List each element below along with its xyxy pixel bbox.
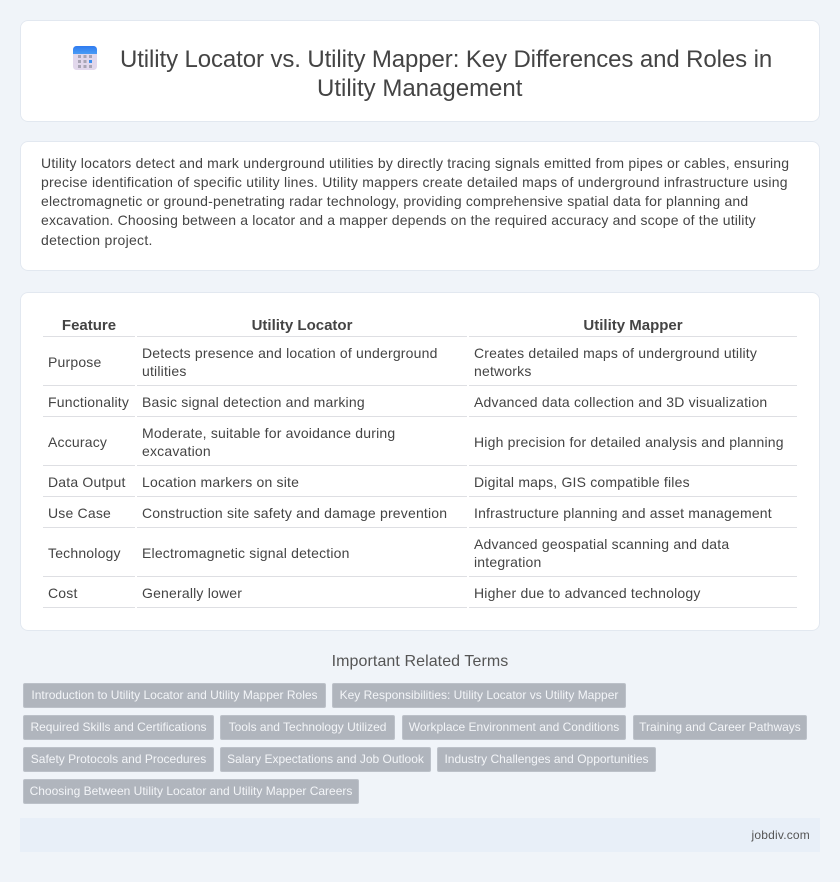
icon: calendar xyxy=(73,46,97,70)
row: purpose: utilities xyxy=(142,362,187,378)
row: accuracy: High precision for detailed analysis and planning xyxy=(474,434,784,450)
row: technology: integration xyxy=(474,554,541,570)
footer source text: jobdiv.com xyxy=(752,828,810,842)
row: functionality: Basic signal detection and marking xyxy=(142,394,365,410)
row: data output: Location markers on site xyxy=(142,474,299,490)
row: cost: Higher due to advanced technology xyxy=(474,584,701,600)
tag: Workplace Environment and Conditions xyxy=(409,720,619,734)
row: data output: Data Output xyxy=(48,474,126,490)
row: data output xyxy=(43,474,797,497)
title: Utility Management xyxy=(317,75,522,102)
row: use case: Construction site safety and damage prevention xyxy=(142,504,447,520)
row: accuracy xyxy=(43,424,797,466)
tag xyxy=(23,779,359,804)
tag: Introduction to Utility Locator and Utility Mapper Roles xyxy=(31,688,318,702)
row: accuracy: Moderate, suitable for avoidance during xyxy=(142,424,395,440)
panel: title card xyxy=(20,20,820,122)
title: Utility Locator vs. Utility Mapper: Key Differences and Roles in xyxy=(120,46,772,73)
row: cost: Generally lower xyxy=(142,584,242,600)
intro paragraph xyxy=(41,154,789,248)
row: functionality: Functionality xyxy=(48,394,129,410)
intro paragraph: detection project. xyxy=(41,232,153,248)
row: purpose: Detects presence and location of underground xyxy=(142,344,438,360)
tag: Required Skills and Certifications xyxy=(30,720,207,734)
tag: Safety Protocols and Procedures xyxy=(31,752,206,766)
related terms tags xyxy=(23,683,807,804)
panel: comparison table xyxy=(20,292,820,631)
table header: Feature xyxy=(62,316,116,334)
tag: Training and Career Pathways xyxy=(639,720,801,734)
table header xyxy=(43,316,797,337)
panel: introduction text xyxy=(20,141,820,271)
tag: Tools and Technology Utilized xyxy=(229,720,386,734)
row: use case: Use Case xyxy=(48,504,111,520)
row: cost xyxy=(43,584,797,608)
heading: important related terms: Important Related Terms xyxy=(332,653,508,670)
tag xyxy=(23,683,326,708)
row: purpose: Creates detailed maps of underground utility xyxy=(474,344,757,360)
row: use case: Infrastructure planning and asset management xyxy=(474,504,772,520)
row: accuracy: excavation xyxy=(142,442,211,458)
row: data output: Digital maps, GIS compatible files xyxy=(474,474,690,490)
intro paragraph: precise identification of specific utility lines. Utility mappers create detailed maps of underground infrastructure using xyxy=(41,174,788,190)
tag: Industry Challenges and Opportunities xyxy=(444,752,649,766)
row: technology: Technology xyxy=(48,544,121,560)
tag xyxy=(220,747,431,772)
tag: Key Responsibilities: Utility Locator vs Utility Mapper xyxy=(340,688,618,702)
row: use case xyxy=(43,504,797,528)
intro paragraph: excavation. Choosing between a locator and a mapper depends on the required accuracy and scope of the utility xyxy=(41,212,756,228)
intro paragraph: electromagnetic or ground-penetrating radar technology, providing comprehensive spatial data for planning and xyxy=(41,193,748,209)
table header: Utility Mapper xyxy=(583,316,683,334)
row: purpose: networks xyxy=(474,362,532,378)
table header: Utility Locator xyxy=(252,316,352,334)
tag: Salary Expectations and Job Outlook xyxy=(227,752,424,766)
row: functionality: Advanced data collection and 3D visualization xyxy=(474,394,767,410)
tag xyxy=(23,715,214,740)
footer xyxy=(20,818,820,852)
row: purpose: Purpose xyxy=(48,354,101,370)
title xyxy=(120,46,772,102)
tag xyxy=(437,747,656,772)
row: technology: Electromagnetic signal detection xyxy=(142,544,350,560)
row: technology: Advanced geospatial scanning and data xyxy=(474,536,729,552)
row: technology xyxy=(43,536,797,577)
tag xyxy=(402,715,626,740)
tag xyxy=(220,715,395,740)
row: cost: Cost xyxy=(48,584,78,600)
tag xyxy=(332,683,626,708)
tag xyxy=(633,715,807,740)
tag: Choosing Between Utility Locator and Utility Mapper Careers xyxy=(30,784,352,798)
tag xyxy=(23,747,214,772)
row: accuracy: Accuracy xyxy=(48,434,107,450)
row: purpose xyxy=(43,344,797,386)
intro paragraph: Utility locators detect and mark underground utilities by directly tracing signals emitted from pipes or cables, ensuring xyxy=(41,154,789,170)
row: functionality xyxy=(43,394,797,417)
